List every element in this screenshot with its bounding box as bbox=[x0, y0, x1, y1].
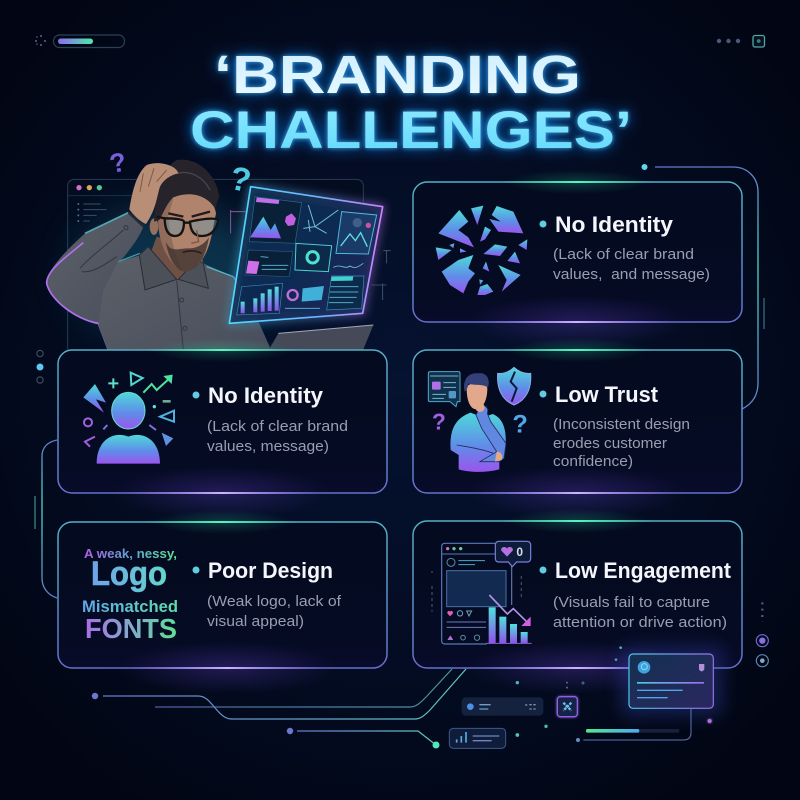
heading: Low Trust bbox=[555, 382, 659, 407]
top right dots and square bbox=[717, 36, 764, 47]
icon: social post with falling bars bbox=[432, 541, 532, 644]
description: (Lack of clear brand bbox=[207, 418, 348, 435]
progress bar bbox=[576, 708, 691, 742]
icon: mismatched fonts: Mismatched bbox=[82, 597, 178, 616]
icon: person with scattered shapes bbox=[83, 373, 174, 464]
description: erodes customer bbox=[553, 435, 667, 452]
eyebrows, nose, mouth bbox=[168, 212, 210, 253]
panel frame bbox=[413, 509, 742, 694]
side technical marks bbox=[231, 210, 391, 300]
man arm raised bbox=[47, 213, 143, 325]
falling bars bbox=[486, 607, 532, 643]
description: (Inconsistent design bbox=[553, 416, 690, 433]
description: values, message) bbox=[207, 438, 329, 455]
question mark left: ? bbox=[432, 408, 446, 434]
person hair bbox=[464, 373, 489, 392]
chart pill bbox=[449, 728, 506, 748]
title: ‘BRANDING bbox=[214, 45, 581, 105]
panel: no identity left bbox=[58, 338, 387, 519]
bullet bbox=[540, 566, 546, 574]
connector right bbox=[642, 164, 764, 409]
heading: No Identity bbox=[555, 212, 674, 237]
icon: mismatched fonts: FONTS bbox=[85, 613, 177, 644]
question mark purple: ? bbox=[107, 146, 129, 179]
status pill bbox=[462, 697, 543, 716]
bullet bbox=[192, 392, 200, 398]
bottom circuit lines bbox=[92, 669, 466, 748]
glow card bbox=[620, 647, 723, 717]
icon: thinking person with shield bbox=[428, 367, 531, 472]
square chip bbox=[557, 697, 577, 717]
shirt details bbox=[80, 213, 247, 350]
description bbox=[553, 594, 727, 631]
top left loader and progress pill bbox=[35, 35, 124, 48]
glasses bbox=[157, 217, 218, 236]
panel: low trust bbox=[413, 338, 742, 519]
question mark right: ? bbox=[512, 411, 528, 439]
icon: shattered circle bbox=[436, 206, 527, 295]
title: CHALLENGES’ bbox=[190, 101, 632, 160]
beard shading bbox=[166, 237, 209, 272]
arm outline bbox=[47, 213, 128, 350]
description: attention or drive action) bbox=[553, 614, 727, 631]
person head bbox=[467, 383, 487, 409]
description: (Lack of clear brand bbox=[553, 246, 694, 263]
heading: Low Engagement bbox=[555, 558, 732, 583]
panel frame bbox=[58, 510, 387, 694]
trend arrow bbox=[489, 595, 531, 626]
shield cracked bbox=[498, 367, 531, 405]
bullet bbox=[540, 220, 546, 228]
hair bbox=[154, 160, 219, 222]
neck bbox=[149, 237, 204, 281]
background browser window bbox=[68, 179, 363, 353]
hologram screen bbox=[229, 187, 383, 323]
description bbox=[553, 246, 710, 283]
zero likes bubble: 0 bbox=[516, 545, 523, 559]
bullet bbox=[192, 566, 200, 574]
bullet bbox=[540, 390, 546, 398]
description: confidence) bbox=[553, 453, 633, 470]
description: (Weak logo, lack of bbox=[207, 593, 342, 610]
person body bbox=[450, 413, 506, 472]
title bbox=[190, 45, 632, 160]
icon: mismatched fonts: Logo bbox=[91, 555, 167, 593]
connector left and page dots bbox=[35, 350, 57, 598]
post frame bbox=[442, 543, 512, 644]
panel frame bbox=[413, 170, 742, 348]
question mark cyan: ? bbox=[227, 160, 254, 200]
icon: mismatched fonts: A weak, nessy, bbox=[84, 546, 177, 561]
panel: low engagement bbox=[413, 509, 742, 694]
description: visual appeal) bbox=[207, 613, 304, 630]
panel frame bbox=[58, 338, 387, 519]
right side rings bbox=[756, 602, 768, 667]
laptop bbox=[267, 325, 373, 353]
description bbox=[553, 416, 690, 470]
description: values, and message) bbox=[553, 266, 710, 283]
man torso bbox=[98, 253, 272, 352]
scattered dots bbox=[515, 646, 712, 737]
description bbox=[207, 418, 348, 455]
panel: poor design bbox=[58, 510, 387, 694]
raised hand bbox=[129, 163, 178, 224]
bottom widgets bbox=[449, 602, 768, 748]
description: (Visuals fail to capture bbox=[553, 594, 710, 611]
teal glow behind man bbox=[73, 207, 273, 340]
panel frame bbox=[413, 338, 742, 519]
man with hologram illustration bbox=[47, 146, 391, 353]
person arm and hand bbox=[457, 403, 506, 462]
heading: Poor Design bbox=[208, 558, 333, 583]
description bbox=[207, 593, 342, 630]
ear bbox=[150, 218, 158, 235]
face bbox=[158, 192, 216, 272]
collar bbox=[139, 247, 208, 290]
face shadow bbox=[158, 198, 183, 272]
panel: no identity top bbox=[413, 170, 742, 348]
heading: No Identity bbox=[208, 383, 324, 408]
chat card bbox=[428, 372, 460, 407]
icon: mismatched fonts bbox=[82, 546, 178, 644]
